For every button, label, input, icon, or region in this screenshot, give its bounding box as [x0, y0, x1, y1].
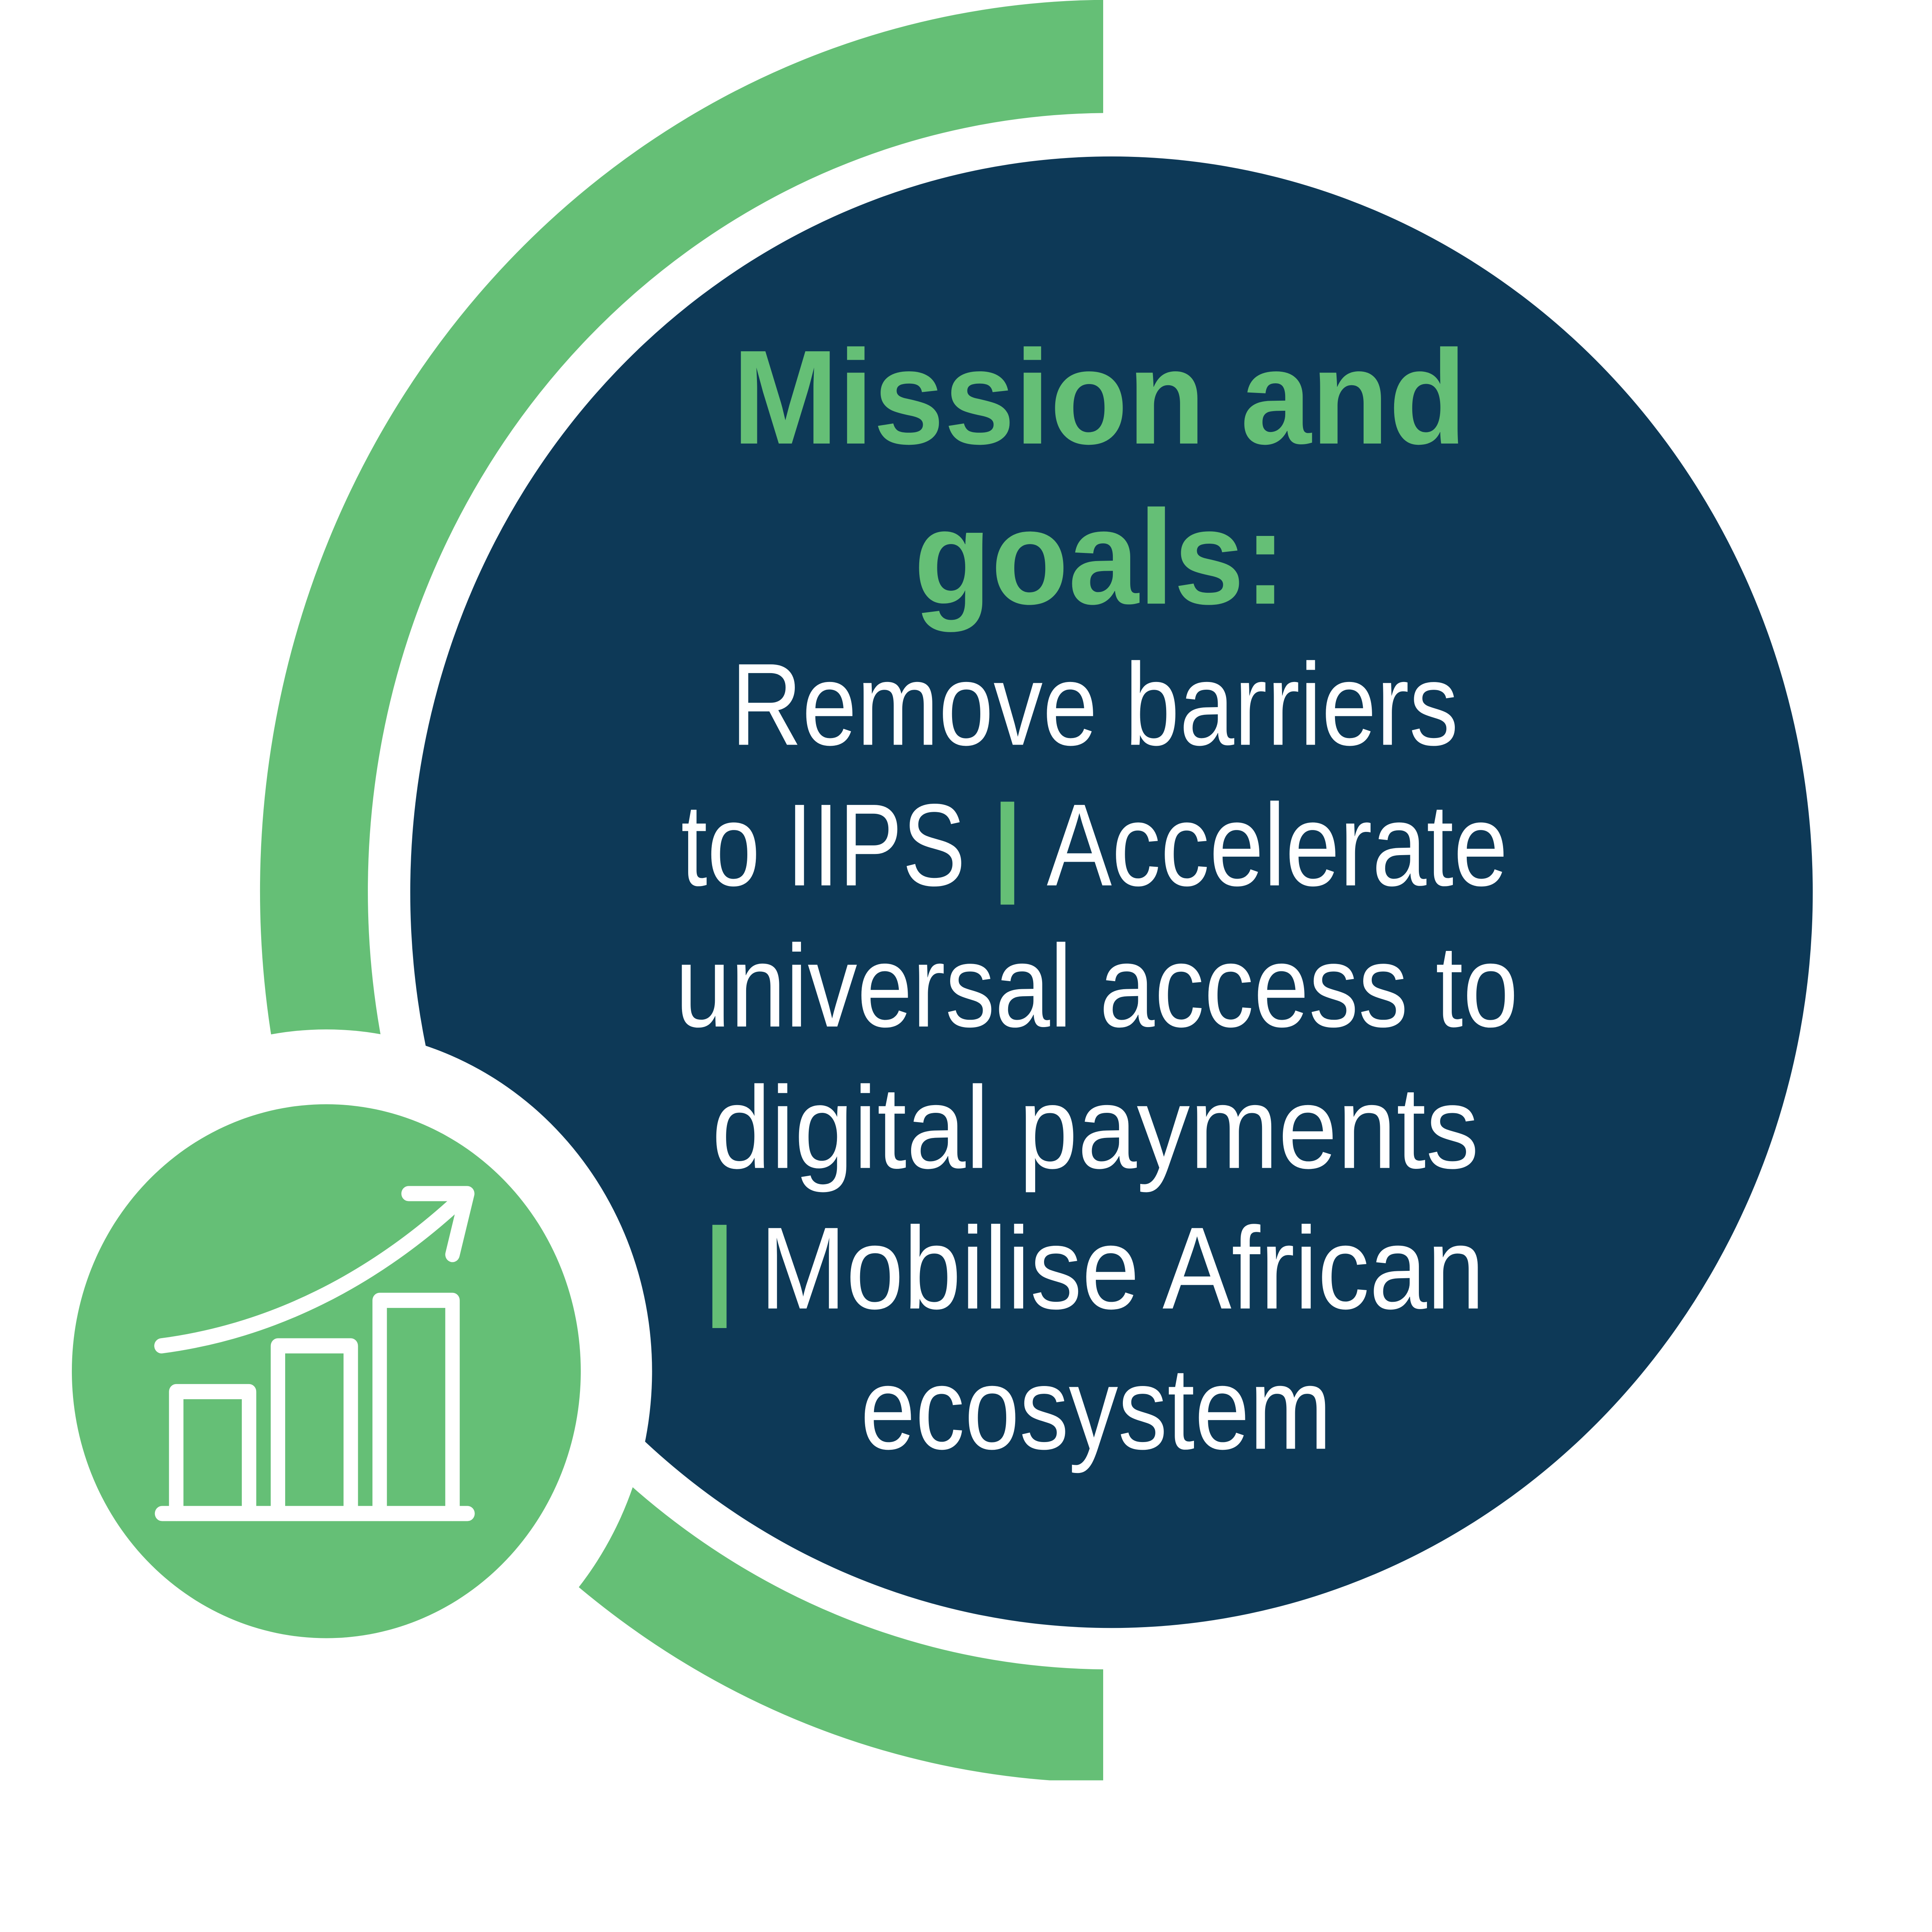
- text block: mission description: [675, 639, 1518, 1475]
- text block: mission description: to IIPS: [681, 779, 966, 910]
- text block: mission description: Remove barriers: [731, 639, 1458, 770]
- text block: mission description: digital payments: [712, 1062, 1479, 1194]
- white circle cut-out behind icon: [0, 1029, 652, 1713]
- text block: mission description: universal access to: [675, 920, 1518, 1051]
- panel: navy main circle: [410, 156, 1813, 1628]
- text block: mission description: ecosystem: [861, 1343, 1332, 1475]
- heading: Mission and goals: goals:: [914, 482, 1286, 633]
- heading: Mission and goals: Mission and: [732, 322, 1466, 472]
- text block: mission description: Accelerate: [1047, 779, 1508, 910]
- icon: bar chart with rising arrow: [162, 1194, 468, 1514]
- panel: green ring arc: [260, 0, 1103, 1781]
- icon badge: green circle with growth chart: [72, 1104, 581, 1638]
- heading: Mission and goals: [732, 322, 1466, 633]
- text block: mission description: Mobilise African: [760, 1202, 1485, 1333]
